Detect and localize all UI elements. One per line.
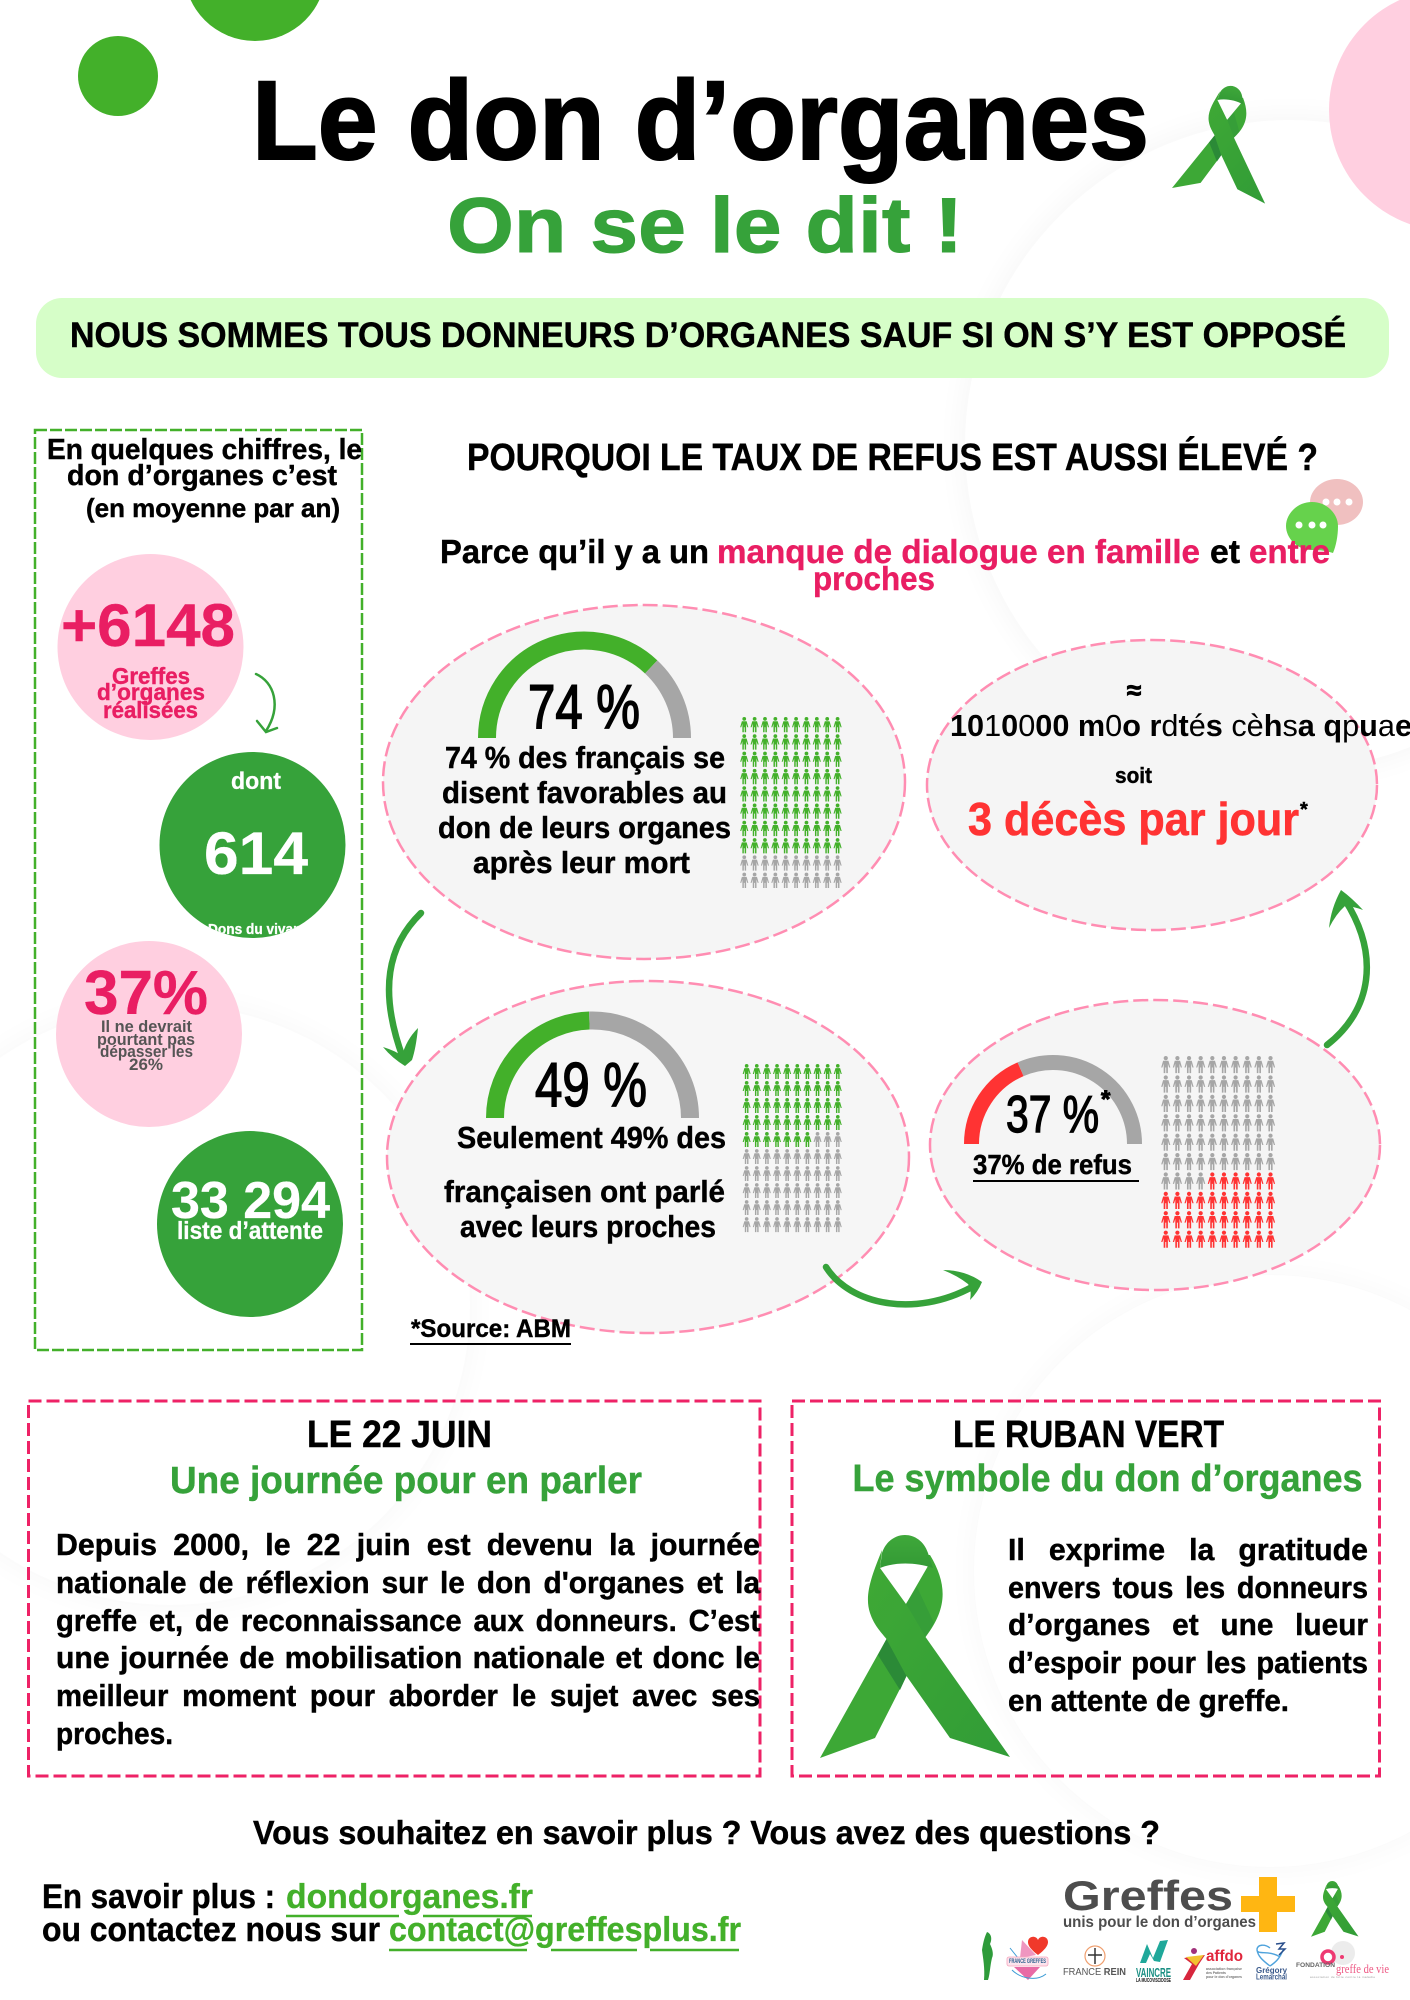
text 74 percent: don de leurs organes (438, 810, 731, 845)
icon: large green ribbon (820, 1535, 1010, 1758)
paragraph: 22 June: nationale de réflexion sur le don d'organes et la (56, 1565, 761, 1600)
text 49 percent: avec leurs proches (460, 1209, 716, 1244)
paragraph: 22 June (56, 1527, 761, 1751)
people grid 74 percent (740, 717, 842, 888)
footer contact links: En savoir plus : (42, 1878, 275, 1916)
stat: 6148 grafts: Greffes (112, 663, 190, 689)
logo: France Greffes: FRANCE GREFFES (1009, 1959, 1046, 1965)
logo: Greffes Plus (1063, 1872, 1295, 1932)
logo: Gregory Lemarchal: Lemarchal (1256, 1972, 1287, 1982)
logo: AFFDO: affdo (1206, 1948, 1243, 1965)
panel: green ribbon: LE RUBAN VERT (953, 1414, 1224, 1456)
stat: 37 percent: 37% (84, 959, 208, 1028)
stat: 37 percent: pourtant pas (97, 1030, 195, 1049)
logo: Vaincre (1136, 1940, 1171, 1984)
stat: 37 percent (56, 941, 242, 1127)
text 37 percent: 37% de refus (973, 1149, 1132, 1180)
stat: 614 living donors (160, 752, 346, 938)
footer contact links: ou contactez nous sur (42, 1911, 380, 1949)
stat: 6148 grafts: +6148 (61, 592, 235, 659)
value 37 percent: 37 % (1006, 1086, 1099, 1144)
panel: deaths per day: * (1300, 799, 1308, 821)
paragraph: ribbon: d’organes et une lueur (1008, 1607, 1368, 1642)
stat: 6148 grafts (58, 554, 244, 740)
text 74 percent: après leur mort (473, 845, 690, 880)
logo: AFFDO: des Patients (1206, 1971, 1226, 1975)
subheading: lack of dialogue (440, 533, 1330, 597)
source note: *Source: ABM (411, 1315, 571, 1343)
text 49 percent (444, 1120, 726, 1244)
paragraph: 22 June: meilleur moment pour aborder le sujet avec ses (56, 1678, 760, 1713)
footer contact links: dondorganes.fr (286, 1878, 533, 1916)
logo: France Rein: FRANCE REIN (1063, 1967, 1126, 1978)
arrow: refusal to deaths (1327, 890, 1367, 1045)
logo: Fondation Greffe de Vie (1296, 1941, 1389, 1979)
text 74 percent: disent favorables au (442, 775, 727, 810)
stat: waiting list: 33 294 (171, 1172, 330, 1230)
panel heading (47, 434, 362, 523)
stat: 6148 grafts: d’organes (97, 679, 205, 705)
banner: NOUS SOMMES TOUS DONNEURS D’ORGANES SAUF SI ON S’Y EST OPPOSÉ (70, 315, 1346, 355)
gauge 74 percent (487, 641, 682, 738)
panel: deaths per day: ≈ (1127, 675, 1141, 705)
paragraph: 22 June: proches. (56, 1716, 173, 1751)
logo: Gregory Lemarchal (1256, 1943, 1288, 1982)
icon: speech bubbles (1286, 479, 1363, 553)
panel: 22 June: LE 22 JUIN (307, 1414, 492, 1456)
decorative green circle top (184, 0, 326, 41)
subheading: lack of dialogue: Parce qu’il y a un (440, 533, 709, 570)
subheading: lack of dialogue: proches (813, 560, 935, 597)
panel heading: En quelques chiffres, le (47, 434, 362, 466)
paragraph: 22 June: une journée de mobilisation nationale et donc le (56, 1640, 760, 1675)
logo: AFFDO: association française (1206, 1967, 1242, 1971)
stat: waiting list (157, 1131, 343, 1317)
banner (36, 298, 1389, 378)
logo: Vaincre: VAINCRE (1136, 1965, 1171, 1980)
logo: Gregory Lemarchal: Grégory (1256, 1966, 1288, 1975)
panel: green ribbon: Le symbole du don d’organes (852, 1458, 1362, 1500)
logo: France Greffes (1007, 1937, 1048, 1980)
small arrow (256, 674, 277, 732)
panel: deaths per day (927, 640, 1410, 930)
logo: Fondation Greffe de Vie: FONDATION (1296, 1963, 1335, 1969)
logo: Vaincre: LA MUCOVISCIDOSE (1136, 1978, 1171, 1984)
logo: Greffes Plus: unis pour le don d’organes (1063, 1914, 1256, 1931)
footer contact links: contact@greffesplus.fr (389, 1911, 741, 1949)
arrow: favourable to talked (383, 913, 421, 1066)
panel: green ribbon (792, 1401, 1380, 1776)
stat: waiting list: liste d’attente (177, 1217, 323, 1245)
stat: 614 living donors: Dons du vivant (208, 921, 306, 938)
panel: deaths per day: 1010000 m0o rdtés cèhsa qpuae (950, 708, 1410, 743)
panel heading: (en moyenne par an) (86, 493, 340, 523)
value 74 percent: 74 % (528, 673, 640, 742)
panel: 74 percent favourable (383, 605, 905, 959)
subtitle: On se le dit ! (447, 181, 963, 269)
paragraph: ribbon: Il exprime la gratitude (1008, 1532, 1368, 1567)
icon: footer ribbon (1311, 1881, 1358, 1937)
decorative green circle left (78, 36, 158, 116)
gauge 49 percent (495, 1020, 690, 1118)
stat: 6148 grafts: réalisées (103, 697, 198, 723)
panel: 22 June (28, 1401, 761, 1776)
panel: deaths per day: soit (1115, 763, 1153, 788)
panel: deaths per day: 3 décès par jour (968, 793, 1299, 845)
logo: Fondation Greffe de Vie: association de lutte contre la maladie (1310, 1975, 1375, 1979)
stat: 37 percent: dépasser les (100, 1042, 193, 1061)
arrow: talked to refusal (826, 1267, 982, 1304)
stat: 614 living donors: 614 (204, 820, 309, 887)
logo: Greffes Plus: Greffes (1063, 1872, 1233, 1919)
heading: why refusal rate: POURQUOI LE TAUX DE REFUS EST AUSSI ÉLEVÉ ? (467, 435, 1318, 479)
footer contact links (42, 1878, 741, 1950)
subheading: lack of dialogue: entre (1249, 533, 1330, 570)
logo: AFFDO (1183, 1948, 1243, 1980)
stat: 37 percent: Il ne devrait (101, 1017, 192, 1036)
logo: France Rein (1063, 1946, 1126, 1978)
text 74 percent: 74 % des français se (445, 740, 725, 775)
paragraph: ribbon (1008, 1532, 1368, 1718)
logo: Fondation Greffe de Vie: greffe de vie (1336, 1961, 1389, 1976)
text 74 percent (438, 740, 731, 880)
paragraph: 22 June: Depuis 2000, le 22 juin est devenu la journée (56, 1527, 760, 1562)
panel: key figures (35, 430, 362, 1350)
icon: green ribbon top (1172, 79, 1284, 204)
title: Le don d’organes (252, 58, 1149, 183)
paragraph: ribbon: en attente de greffe. (1008, 1683, 1289, 1718)
partner logos (982, 1932, 1389, 1984)
panel heading: don d’organes c’est (67, 460, 337, 492)
text 49 percent: françaisen ont parlé (444, 1174, 725, 1209)
value 37 percent: * (1101, 1086, 1111, 1113)
logo: green figure (982, 1932, 993, 1980)
people grid 37 percent (1161, 1056, 1275, 1248)
panel: 22 June: Une journée pour en parler (170, 1460, 642, 1502)
footer question: Vous souhaitez en savoir plus ? Vous avez des questions ? (253, 1814, 1160, 1851)
paragraph: ribbon: envers tous les donneurs (1008, 1570, 1368, 1605)
subheading: lack of dialogue: et (1210, 533, 1240, 570)
value 49 percent: 49 % (535, 1051, 647, 1120)
panel: 49 percent talked (387, 981, 909, 1333)
gauge 37 percent (972, 1062, 1134, 1144)
text 49 percent: Seulement 49% des (457, 1120, 726, 1155)
stat: 614 living donors: dont (231, 768, 281, 795)
stat: 37 percent: 26% (129, 1055, 163, 1074)
people grid 49 percent (743, 1064, 842, 1232)
logo: AFFDO: pour le don d’organes (1206, 1975, 1242, 1979)
panel: 37 percent refusal (930, 1000, 1380, 1290)
paragraph: ribbon: d’espoir pour les patients (1008, 1645, 1368, 1680)
subheading: lack of dialogue: manque de dialogue en famille (717, 533, 1200, 570)
paragraph: 22 June: greffe et, de reconnaissance aux donneurs. C’est (56, 1603, 760, 1638)
decorative pink circle right (1329, 0, 1410, 231)
